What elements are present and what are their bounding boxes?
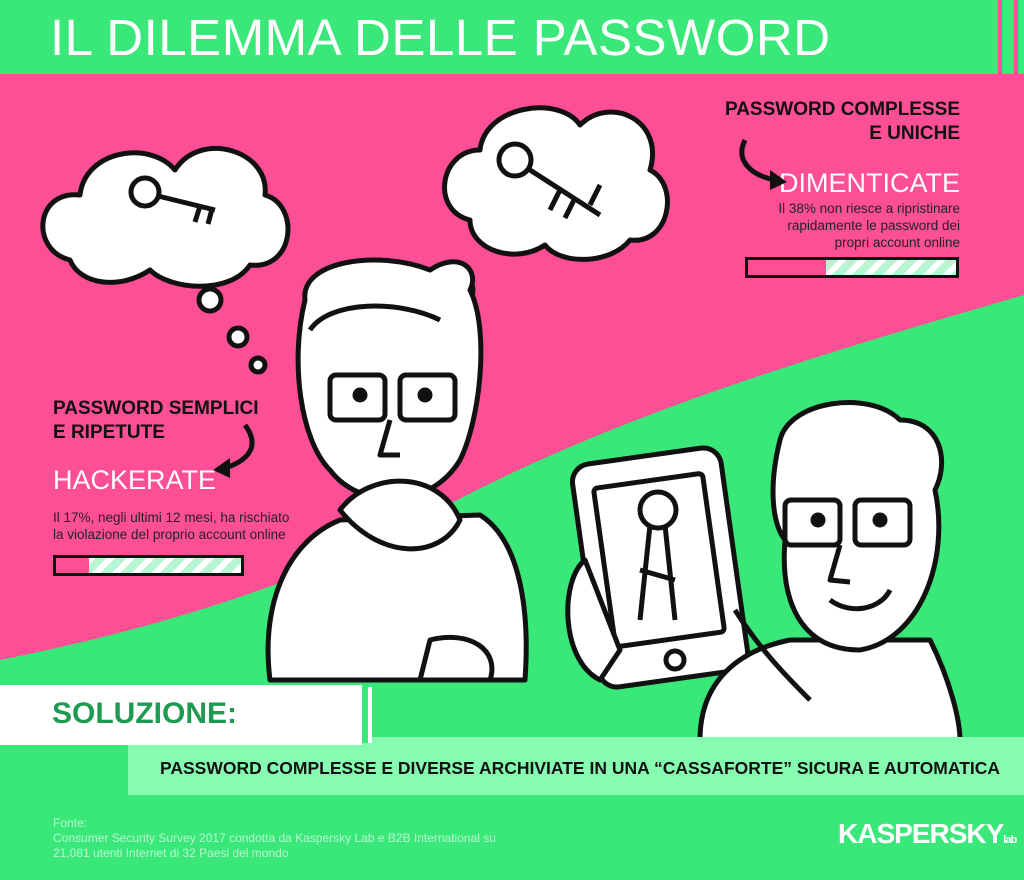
source (53, 816, 496, 860)
title: IL DILEMMA DELLE PASSWORD (50, 9, 831, 66)
bar right (745, 257, 959, 278)
solution label box (0, 685, 362, 745)
heading: semplici: PASSWORD SEMPLICI (53, 398, 258, 419)
heading: semplici (53, 398, 258, 443)
man thinking (268, 260, 526, 680)
right text block (725, 99, 960, 250)
man happy (700, 403, 960, 740)
arrow left (213, 424, 255, 478)
heading: complesse (725, 99, 960, 144)
solution text: PASSWORD COMPLESSE E DIVERSE ARCHIVIATE IN UNA “CASSAFORTE” SICURA E AUTOMATICA (160, 758, 1000, 778)
stat text (778, 201, 960, 250)
label: dimenticate: DIMENTICATE (779, 168, 960, 198)
logo: KASPERSKYlab (838, 818, 1016, 849)
heading: semplici: E RIPETUTE (53, 422, 165, 443)
arrow right (739, 138, 787, 190)
stat text: la violazione del proprio account online (53, 527, 286, 542)
solution band (128, 737, 1024, 795)
header pink lines (998, 0, 1002, 74)
heading: complesse: PASSWORD COMPLESSE (725, 99, 960, 120)
header bar (0, 0, 1024, 74)
left text block (53, 398, 289, 542)
solution label box: SOLUZIONE: (52, 697, 237, 730)
bar left (53, 555, 244, 576)
cloud left (43, 148, 288, 372)
stat text: Il 38% non riesce a ripristinare (778, 201, 960, 216)
label: hackerate: HACKERATE (53, 465, 216, 495)
source: 21,081 utenti Internet di 32 Paesi del mondo (53, 846, 288, 860)
stat text (53, 510, 289, 542)
heading: complesse: E UNICHE (869, 123, 960, 144)
stat text: rapidamente le password dei (787, 218, 960, 233)
source: Fonte: (53, 816, 87, 830)
phone (568, 446, 750, 689)
stat text: Il 17%, negli ultimi 12 mesi, ha rischiato (53, 510, 289, 525)
cloud center (421, 108, 667, 384)
source: Consumer Security Survey 2017 condotta da Kaspersky Lab e B2B International su (53, 831, 496, 845)
stat text: propri account online (835, 235, 960, 250)
